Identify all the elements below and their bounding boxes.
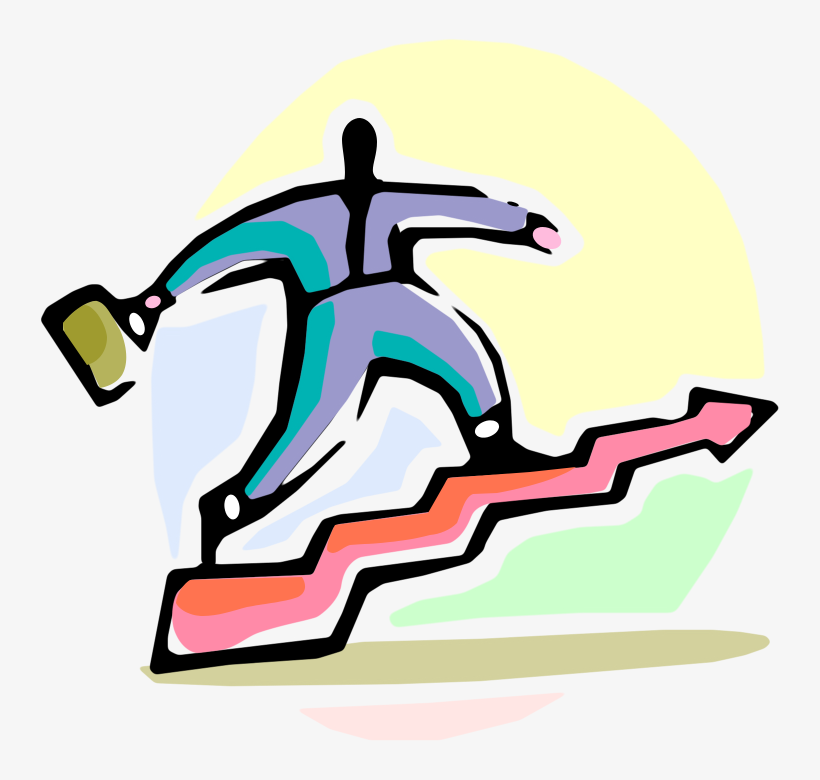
left shoe highlight bbox=[223, 494, 241, 520]
olive ground shadow bbox=[137, 630, 771, 686]
right leg teal band bbox=[372, 330, 483, 417]
right arm underside and hand outline bbox=[385, 212, 560, 298]
pink arrow ribbon bbox=[172, 402, 752, 653]
staircase interior bbox=[168, 402, 755, 655]
briefcase light panel bbox=[63, 301, 126, 388]
pale green shape bbox=[387, 464, 757, 628]
pale yellow sun disc bbox=[186, 39, 765, 439]
left arm and torso sleeve bbox=[167, 194, 350, 298]
sleeve button bbox=[507, 201, 519, 207]
right arm and torso sleeve bbox=[363, 192, 530, 275]
wrist cuff bbox=[143, 294, 163, 310]
orange band upper bbox=[327, 467, 576, 553]
briefcase handle opening bbox=[126, 310, 148, 338]
left arm teal band bbox=[165, 221, 331, 293]
pale blue shape left bbox=[151, 301, 272, 562]
businessman figure bbox=[41, 118, 565, 566]
left leg teal band bbox=[244, 300, 335, 498]
head bbox=[342, 118, 384, 185]
right shoe highlight bbox=[473, 417, 501, 441]
pointing hand bbox=[529, 223, 565, 253]
body and left arm outline bbox=[41, 180, 400, 566]
trousers bbox=[245, 282, 497, 500]
briefcase dark panel bbox=[63, 305, 107, 365]
pale pink reflection bbox=[295, 692, 570, 740]
right arm top outline bbox=[380, 182, 491, 199]
pale blue shape centre bbox=[239, 406, 444, 551]
staircase arrow and right leg outline bbox=[150, 300, 779, 674]
orange band lower bbox=[176, 577, 305, 616]
